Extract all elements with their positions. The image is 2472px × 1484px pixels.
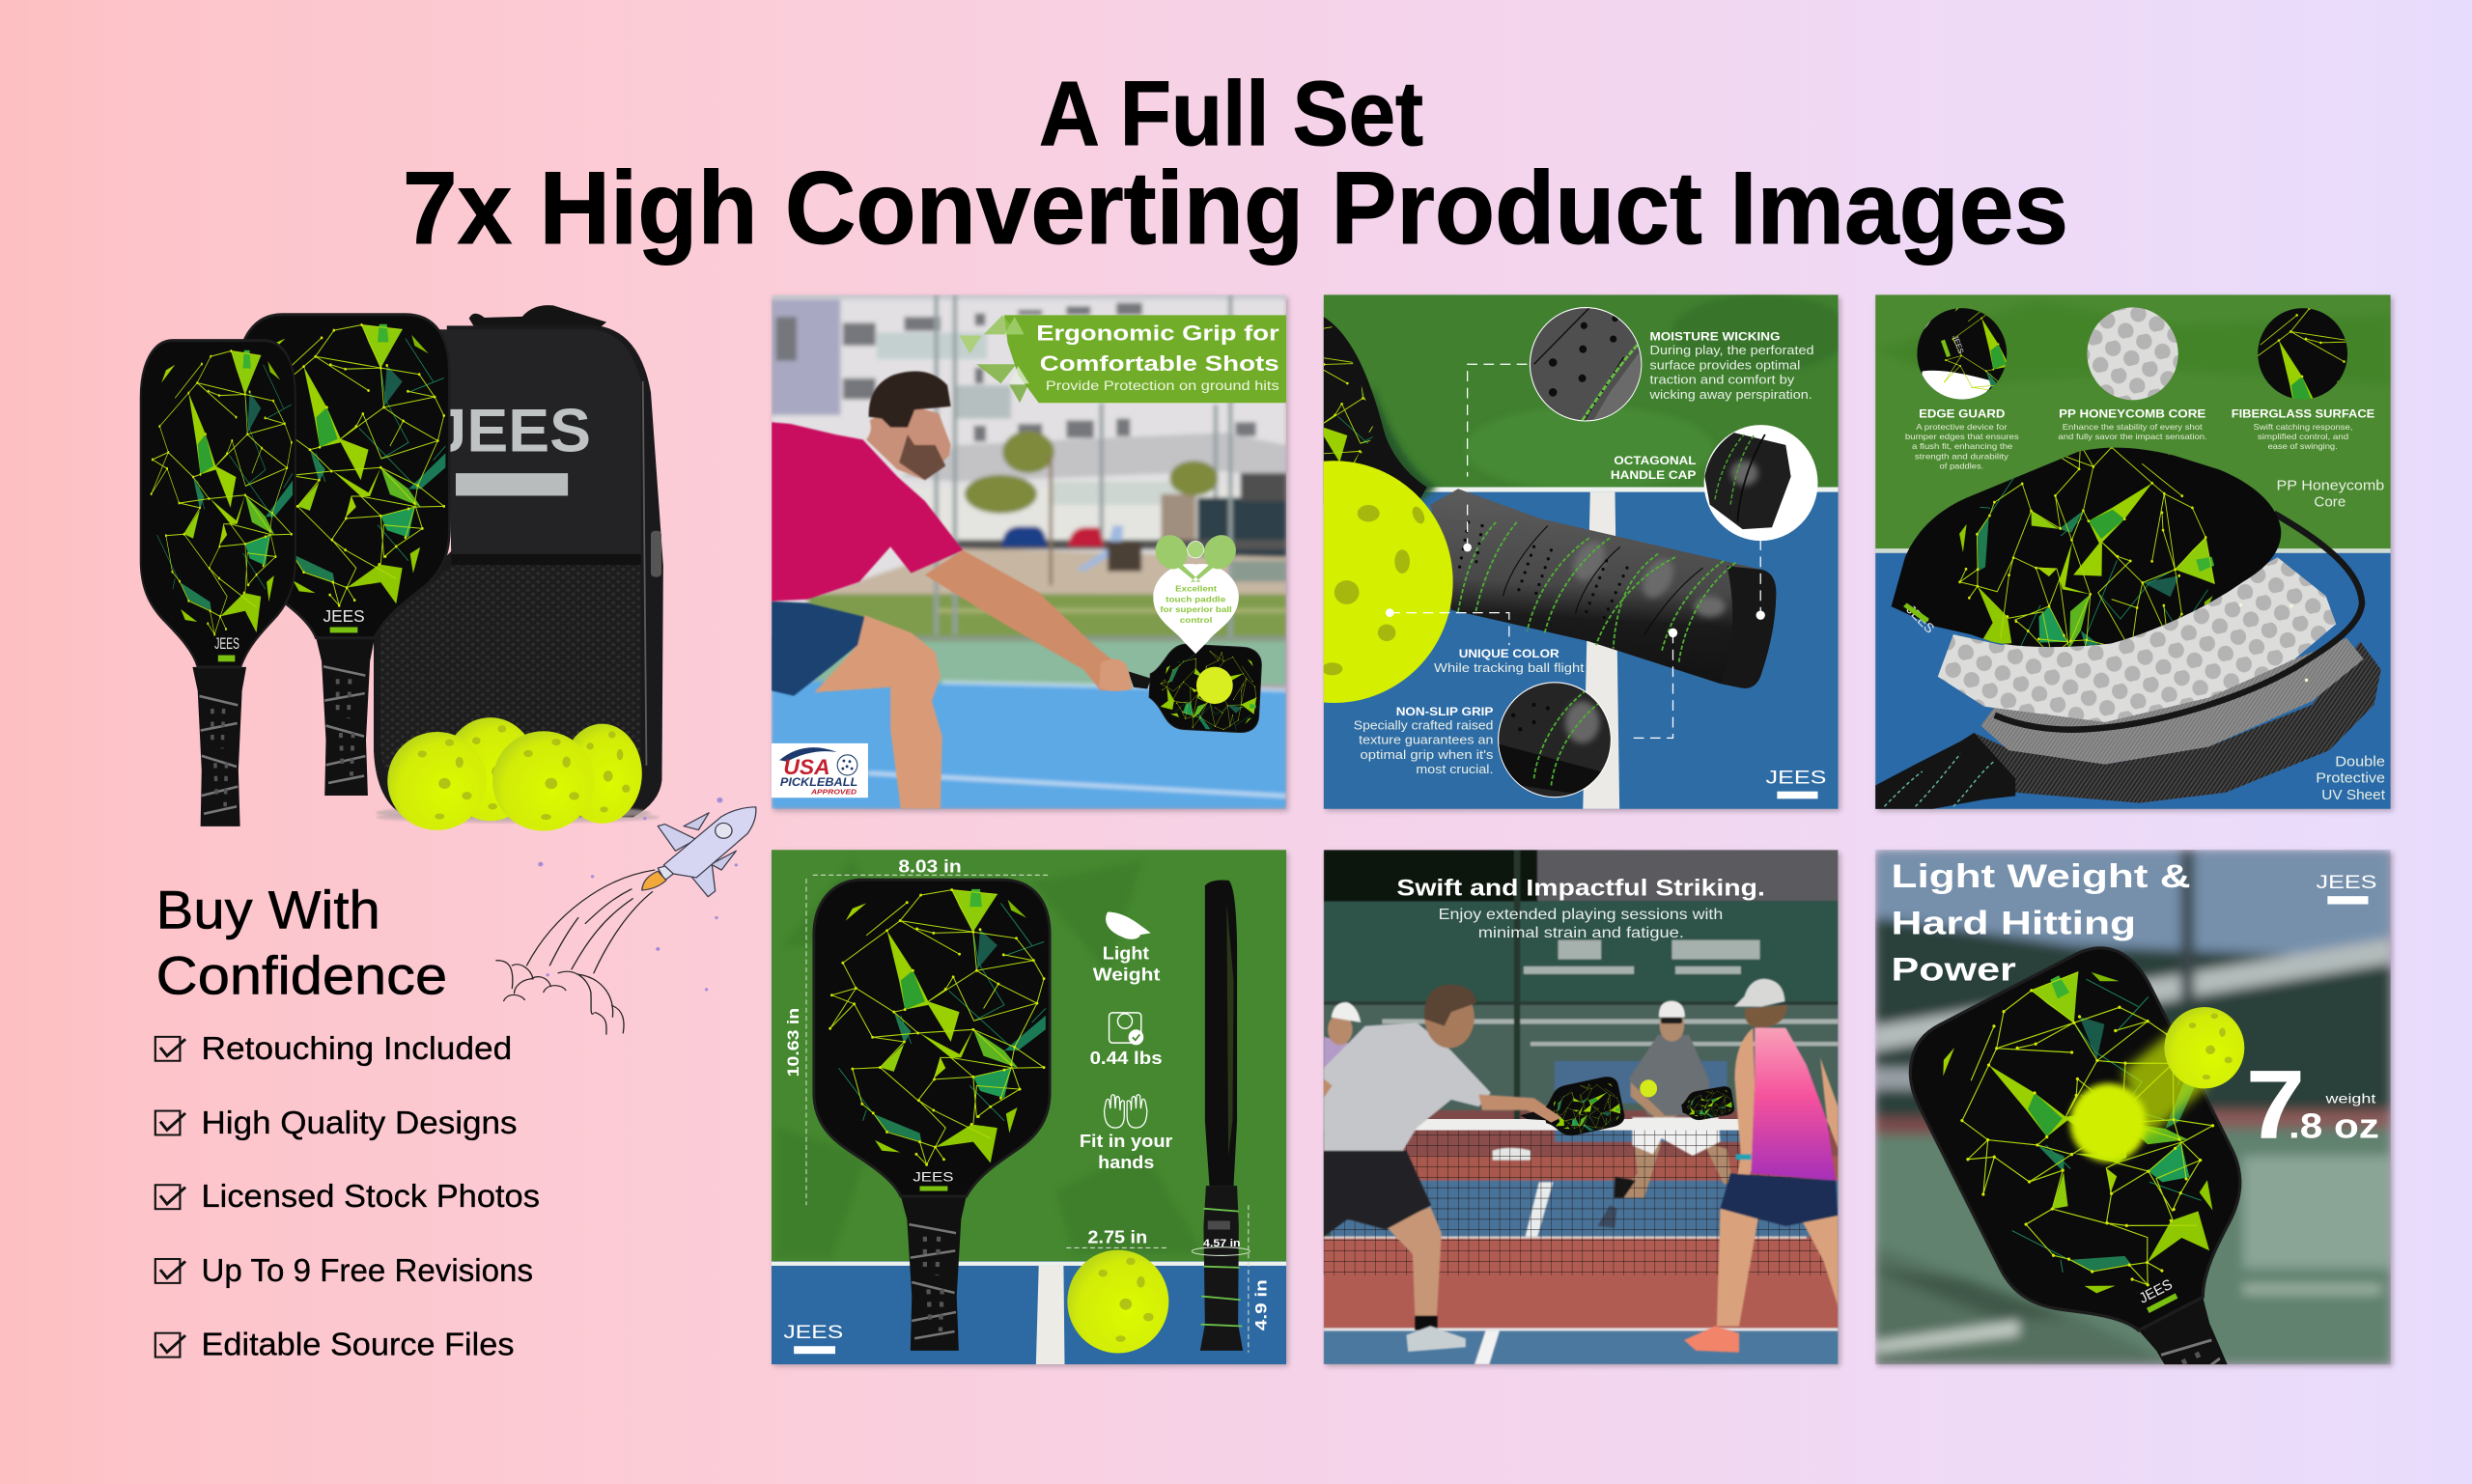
feature copy: a flush fit, enhancing the (1912, 442, 2013, 451)
callout copy: Specially crafted raised (1354, 718, 1493, 732)
court background (1324, 294, 1851, 809)
callout copy: optimal grip when it's (1361, 748, 1493, 762)
USA Pickleball approved badge (772, 743, 868, 798)
callout copy: texture guarantees an (1359, 733, 1493, 747)
player (772, 372, 1132, 809)
feature copy: Double (2335, 754, 2385, 770)
callout copy (1354, 331, 1814, 776)
feature: light weight: Light (1103, 943, 1149, 964)
pickleball (1067, 1250, 1168, 1353)
callout: control (1180, 616, 1212, 625)
feature copy: PP HONEYCOMB CORE (2059, 406, 2205, 421)
JEES logo: JEES (783, 1322, 843, 1343)
panel: dimensions (772, 850, 1286, 1364)
dashed connectors (1390, 364, 1760, 738)
heading: Hard Hitting (1892, 905, 2136, 941)
background photo (772, 294, 1286, 809)
panel: ergonomic grip lifestyle photo (772, 294, 1286, 809)
inset circles (1916, 292, 2422, 551)
grey inner layer (1980, 638, 2364, 765)
back-court player (1324, 1002, 1361, 1068)
callout copy: OCTAGONAL (1614, 456, 1696, 467)
callout copy: traction and comfort by (1650, 374, 1795, 387)
feature copy: and fully savor the impact sensation. (2058, 433, 2207, 441)
blurred court background (1875, 850, 2391, 1364)
paddle side view (1200, 880, 1243, 1351)
front paddle: JEES (214, 635, 239, 653)
weight callout: .8 oz (2289, 1106, 2379, 1145)
feature copy: Swift catching response, (2254, 423, 2352, 432)
back paddle (239, 315, 449, 796)
panel: doubles match photo (1324, 850, 1839, 1364)
front-left player (1324, 985, 1562, 1352)
court background (1875, 294, 2391, 809)
feature copy: strength and durability (1915, 452, 2009, 461)
callout copy: While tracking ball flight (1434, 661, 1585, 675)
dimension labels: 4.57 in (1203, 1238, 1241, 1249)
bag logo (433, 396, 591, 495)
feature copy: simplified control, and (2258, 433, 2349, 441)
feature: fit in your hands: hands (1098, 1153, 1154, 1172)
callout copy: wicking away perspiration. (1648, 388, 1812, 402)
callout copy: UNIQUE COLOR (1459, 649, 1559, 660)
dimension labels (784, 856, 1270, 1330)
JEES logo (1766, 768, 1826, 798)
feature copy: EDGE GUARD (1919, 406, 2006, 421)
heading: Buy With (156, 881, 380, 940)
feature copy: FIBERGLASS SURFACE (2232, 406, 2374, 421)
dimension labels: 4.9 in (1252, 1279, 1270, 1330)
feature: fit in your hands: Fit in your (1080, 1132, 1172, 1151)
weight callout (2246, 1050, 2379, 1160)
callout: for superior ball (1160, 605, 1232, 614)
callout copy: During play, the perforated (1650, 344, 1814, 357)
JEES logo (783, 1322, 843, 1354)
inset: octagonal handle cap (1704, 425, 1817, 541)
court background (772, 850, 1286, 1364)
JEES logo (2317, 872, 2376, 905)
panel shadows (773, 297, 2393, 1366)
bag logo: JEES (433, 396, 591, 464)
feature copy: Core (2314, 494, 2346, 511)
checklist item: High Quality Designs (202, 1105, 518, 1141)
inset: non-slip grip (1496, 682, 1614, 799)
USA Pickleball approved badge: USA (783, 755, 830, 779)
feature copy: UV Sheet (2321, 788, 2385, 803)
back paddle: JEES (323, 608, 365, 626)
title (403, 63, 2068, 266)
feature: fit in your hands (1080, 1095, 1172, 1172)
motion-blurred balls (2070, 1007, 2244, 1162)
callout copy: MOISTURE WICKING (1650, 331, 1781, 344)
headline banner: Comfortable Shots (1040, 351, 1279, 376)
feature copy: bumper edges that ensures (1905, 433, 2019, 441)
dimension marks (806, 875, 1250, 1353)
checklist item: Up To 9 Free Revisions (202, 1252, 533, 1289)
front-right player (1684, 979, 1839, 1353)
hero paddle: JEES (2137, 1276, 2176, 1307)
honeycomb core layer (1938, 557, 2336, 722)
center player (1598, 1000, 1732, 1228)
heading: Confidence (156, 946, 447, 1006)
fiberglass top sheet: JEES (1904, 602, 1937, 636)
dimension labels: 10.63 in (784, 1008, 802, 1077)
product hero: paddles, bag and balls (141, 305, 663, 831)
heading (1892, 858, 2191, 988)
USA Pickleball approved badge: APPROVED (810, 788, 857, 797)
callout copy: NON-SLIP GRIP (1396, 707, 1494, 718)
dimension labels: 2.75 in (1087, 1227, 1147, 1246)
pickleballs (376, 717, 651, 831)
callout copy: HANDLE CAP (1611, 470, 1697, 482)
weight callout: 7 (2246, 1050, 2305, 1160)
feature copy: A protective device for (1916, 423, 2008, 432)
heading: Power (1892, 951, 2016, 988)
title: A Full Set (1039, 63, 1423, 165)
callout copy: surface provides optimal (1650, 358, 1800, 372)
headline banner: Ergonomic Grip for (1036, 321, 1279, 346)
layer markers (2239, 603, 2308, 682)
feature copy: of paddles. (1940, 462, 1983, 471)
JEES logo: JEES (1766, 768, 1826, 789)
JEES logo: JEES (2317, 872, 2376, 893)
handle (1430, 489, 1776, 688)
edge frame (1995, 514, 2362, 730)
heading overlay (1396, 875, 1765, 941)
feature copy: PP Honeycomb (2276, 478, 2384, 493)
feature copy: Protective (2316, 770, 2385, 787)
USA Pickleball approved badge: PICKLEBALL (780, 777, 857, 789)
callout (1149, 528, 1243, 654)
feature: weight scale: 0.44 lbs (1090, 1049, 1163, 1068)
feature copy: Enhance the stability of every shot (2063, 423, 2204, 432)
feature: light weight (1093, 912, 1160, 984)
dimension labels: 8.03 in (898, 856, 962, 876)
feature copy: ease of swinging. (2268, 442, 2338, 451)
panel: grip detail (1215, 294, 1851, 809)
heading: Light Weight & (1892, 858, 2191, 895)
large paddle (814, 880, 1050, 1351)
paddle and ball being struck (1099, 642, 1262, 734)
feature: light weight: Weight (1093, 965, 1160, 984)
checklist item: Retouching Included (202, 1030, 512, 1066)
feature: weight scale (1090, 1013, 1163, 1068)
pickleball (1215, 461, 1453, 703)
net (1324, 1119, 1827, 1275)
title: 7x High Converting Product Images (403, 150, 2068, 266)
panel: light weight and hard hitting power (1875, 850, 2391, 1484)
callout: Excellent (1175, 584, 1217, 593)
panel: layered paddle construction (1875, 292, 2422, 809)
heading overlay: Enjoy extended playing sessions with (1439, 907, 1723, 923)
paddles and ball in play (1520, 1075, 1735, 1140)
headline banner: Provide Protection on ground hits (1046, 378, 1279, 393)
feature copy (1905, 406, 2385, 803)
carry bag (374, 305, 663, 824)
background (1324, 850, 1839, 1364)
fiberglass top sheet (1892, 416, 2281, 701)
headline banner (960, 315, 1286, 403)
hero paddle (1891, 930, 2364, 1484)
weight callout: weight (2324, 1092, 2376, 1106)
heading overlay: Swift and Impactful Striking. (1396, 875, 1765, 901)
heading overlay: minimal strain and fatigue. (1478, 925, 1684, 941)
paddle head (1231, 317, 1438, 573)
inset circles: JEES (1951, 334, 1965, 355)
large paddle: JEES (913, 1169, 953, 1184)
sidebar: buy with confidence (155, 798, 756, 1362)
rocket illustration (496, 798, 756, 1034)
inset: moisture wicking (1527, 304, 1644, 428)
callout copy: most crucial. (1416, 763, 1493, 776)
carbon base layer (1875, 641, 2381, 809)
front paddle (141, 341, 295, 826)
marker dots (1386, 544, 1765, 637)
heading (156, 881, 447, 1006)
checklist item: Licensed Stock Photos (202, 1179, 540, 1215)
callout: touch paddle (1166, 595, 1226, 603)
checklist item: Editable Source Files (202, 1327, 514, 1362)
